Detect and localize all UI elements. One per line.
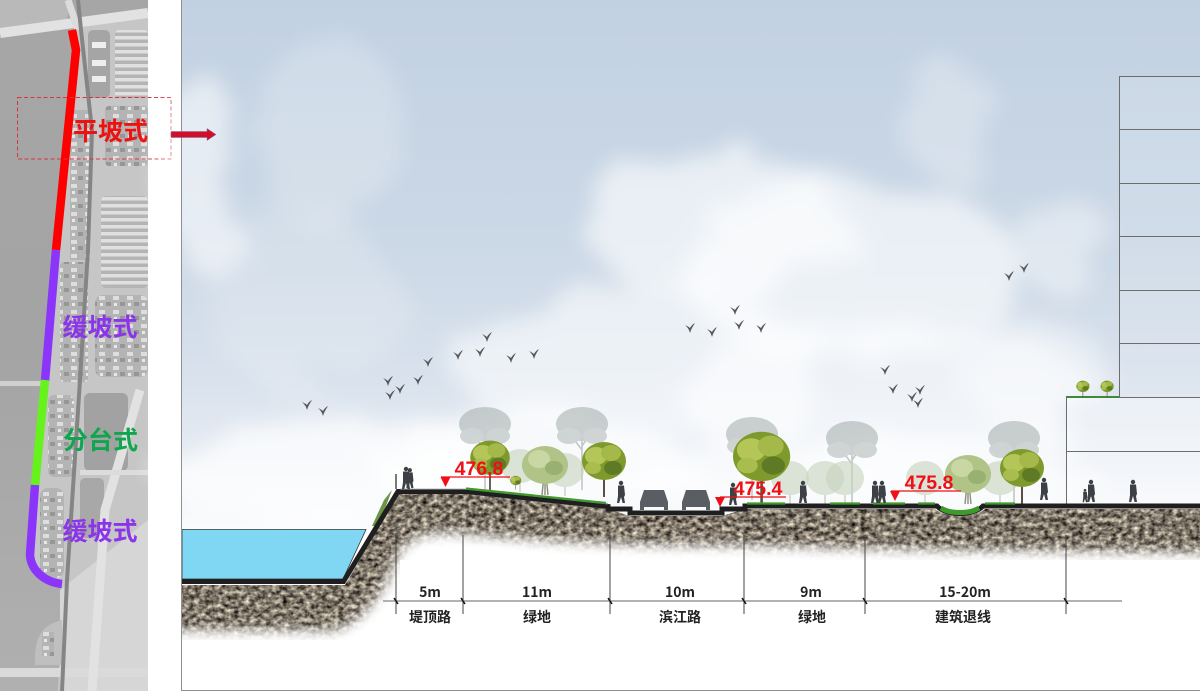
route: upper purple	[45, 250, 56, 381]
dimension lines	[383, 535, 1122, 614]
dimension: 建筑退线: 15-20m	[939, 582, 991, 602]
building outlines	[1066, 76, 1200, 506]
soil section	[170, 494, 1200, 691]
locator map panel	[0, 0, 148, 691]
label: lower 缓坡式: 缓坡式	[62, 512, 138, 548]
sky with clouds	[160, 0, 1200, 530]
land area	[30, 14, 148, 691]
planting strips	[466, 488, 1015, 512]
elevation 475.8	[890, 472, 961, 501]
route: green	[35, 380, 45, 486]
railing	[395, 474, 397, 489]
building blocks	[88, 30, 110, 98]
route: lower purple	[30, 485, 62, 584]
dimension: 堤顶路	[409, 582, 451, 627]
dimension: 绿地 9m: 绿地	[798, 607, 826, 627]
dimension: 建筑退线	[935, 582, 991, 627]
dimension: 绿地 11m: 绿地	[523, 607, 551, 627]
soil fade	[170, 533, 1200, 691]
elevation 475.8: 475.8	[905, 472, 954, 494]
label: 分台式: 分台式	[63, 421, 138, 457]
dimension: 滨江路: 滨江路	[659, 607, 701, 627]
arrow to section	[171, 128, 216, 140]
water	[182, 530, 366, 579]
background trees	[459, 407, 1040, 504]
dimension: 建筑退线: 建筑退线	[935, 607, 991, 627]
dimension: 滨江路	[659, 582, 701, 627]
label: 平坡式: 平坡式	[73, 112, 148, 148]
dimension: 绿地 9m	[798, 582, 826, 627]
elevation 475.4: 475.4	[734, 478, 783, 500]
dimension: 堤顶路: 堤顶路	[409, 607, 451, 627]
elevation 475.4	[715, 478, 786, 507]
main road	[62, 0, 92, 691]
dimension: 绿地 9m: 9m	[800, 582, 822, 602]
elevation 476.8	[440, 458, 510, 487]
dashed selection box	[18, 98, 171, 159]
dimension: 绿地 11m	[522, 582, 552, 627]
route: red	[56, 30, 76, 250]
cars	[640, 490, 710, 510]
foreground trees	[470, 381, 1114, 504]
dimension: 滨江路: 10m	[665, 582, 695, 602]
people	[402, 467, 1137, 505]
elevation 476.8: 476.8	[455, 458, 504, 480]
bank shrubs	[372, 490, 392, 526]
dimension: 堤顶路: 5m	[419, 582, 441, 602]
label: upper 缓坡式: 缓坡式	[62, 308, 138, 344]
dimension: 绿地 11m: 11m	[522, 582, 552, 602]
embankment and ground slab	[182, 492, 1200, 582]
birds	[302, 263, 1029, 416]
